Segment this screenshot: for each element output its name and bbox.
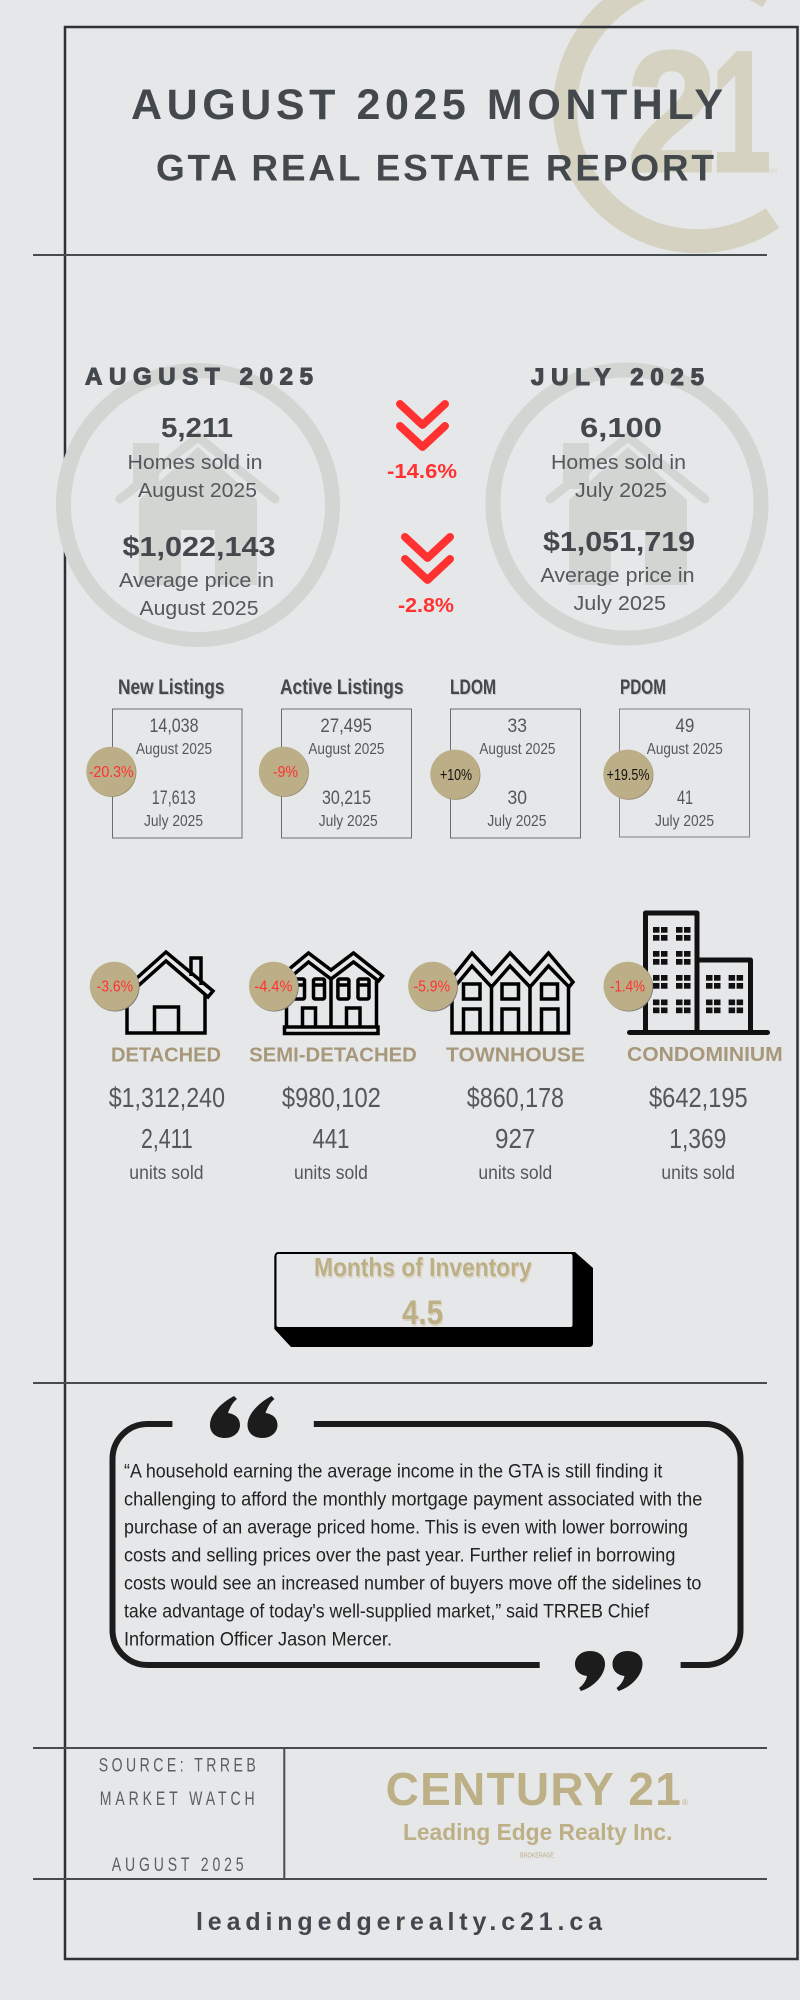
panel: LDOM: LDOM (450, 676, 496, 699)
stat: homes sold July: 6,100 (580, 412, 662, 443)
panel: July 2025 (493, 364, 761, 638)
quote text: Information Officer Jason Mercer. (124, 1629, 392, 1651)
stat: homes sold July (551, 412, 686, 502)
badge: +19.5%: +19.5% (607, 767, 650, 784)
panel: LDOM: 33 (508, 716, 527, 737)
panel: Detached: 2,411 (141, 1123, 193, 1154)
panel: PDOM: 49 (675, 716, 694, 737)
icon: detached house (127, 952, 213, 1033)
panel: Townhouse: $860,178 (467, 1082, 564, 1113)
stat: average price July: $1,051,719 (543, 526, 695, 557)
panel: quote (112, 1396, 740, 1691)
quote text: costs and selling prices over the past year. Further relief in borrowing (124, 1545, 675, 1567)
panel: Active Listings: 30,215 (322, 788, 371, 809)
badge: -3.6%: -3.6% (97, 979, 133, 996)
badge: -20.3% (86, 747, 136, 797)
panel: August 2025 (64, 364, 332, 640)
quote text: take advantage of today's well-supplied market,” said TRREB Chief (124, 1601, 650, 1623)
panel: Semi-detached: SEMI-DETACHED (249, 1045, 417, 1067)
watermark: Century 21 seal: SM (768, 169, 777, 175)
source block: AUGUST 2025 (112, 1854, 244, 1876)
quote text (124, 1461, 702, 1651)
panel: Semi-detached (249, 953, 417, 1184)
panel: Townhouse: TOWNHOUSE (446, 1045, 585, 1067)
website: leadingedgerealty.c21.ca (196, 1908, 603, 1936)
panel: LDOM: 30 (508, 788, 527, 809)
source block: MARKET WATCH (100, 1788, 255, 1810)
logo: Century 21 Leading Edge Realty: CENTURY 21 (386, 1763, 681, 1815)
badge: -9%: -9% (273, 764, 298, 781)
panel: Detached: DETACHED (111, 1045, 221, 1067)
icon: opening quote mark (210, 1396, 278, 1438)
change: average price -2.8%: -2.8% (398, 595, 454, 617)
title: GTA REAL ESTATE REPORT (156, 148, 714, 188)
stat: homes sold August: Homes sold in (128, 452, 262, 474)
badge: -1.4% (604, 962, 653, 1012)
panel: Townhouse: units sold (478, 1163, 552, 1184)
panel: PDOM: PDOM (620, 676, 666, 699)
stat: average price August: Average price in (119, 570, 274, 592)
panel: Active Listings: Active Listings (280, 676, 404, 699)
title: AUGUST 2025 MONTHLY (131, 81, 723, 129)
icon: condominium towers (627, 913, 770, 1035)
badge: -9% (259, 747, 309, 797)
panel: Townhouse (408, 953, 585, 1184)
logo: Century 21 Leading Edge Realty (386, 1763, 688, 1860)
panel: New Listings (86, 676, 242, 838)
panel: New Listings: July 2025 (144, 813, 203, 830)
quote text: challenging to afford the monthly mortgage payment associated with the (124, 1489, 702, 1511)
badge: -1.4%: -1.4% (610, 979, 645, 996)
stat: homes sold August (128, 412, 262, 502)
logo: Century 21 Leading Edge Realty: Leading Edge Realty Inc. (403, 1819, 672, 1845)
heading: August 2025: AUGUST 2025 (85, 364, 313, 390)
badge: -4.4% (249, 962, 299, 1012)
panel: Active Listings (259, 676, 412, 838)
stat: homes sold July: Homes sold in (551, 452, 686, 474)
stat: average price July: Average price in (540, 565, 694, 587)
panel: Condominium: units sold (661, 1163, 735, 1184)
panel: PDOM: August 2025 (647, 741, 723, 758)
panel: New Listings: August 2025 (136, 741, 212, 758)
panel: Townhouse: 927 (495, 1123, 535, 1154)
source block (99, 1748, 284, 1879)
badge: -20.3%: -20.3% (89, 764, 134, 781)
badge: +19.5% (603, 750, 653, 800)
source block: SOURCE: TRREB (99, 1754, 256, 1776)
icon: house in circle, August (64, 370, 332, 640)
quote text: costs would see an increased number of buyers move off the sidelines to (124, 1573, 702, 1595)
panel: Detached (90, 952, 225, 1184)
stat: average price July (540, 526, 695, 615)
watermark: Century 21 seal (565, 0, 777, 241)
badge: +10% (430, 750, 480, 800)
change: homes sold -14.6%: -14.6% (387, 461, 457, 483)
stat: homes sold August: August 2025 (138, 480, 257, 502)
panel: Semi-detached: units sold (294, 1163, 368, 1184)
panel: New Listings: New Listings (118, 676, 224, 699)
callout: months of inventory (274, 1252, 593, 1347)
heading: July 2025: JULY 2025 (531, 364, 704, 391)
quote text: purchase of an average priced home. This is even with lower borrowing (124, 1517, 688, 1539)
stat: average price August (119, 531, 276, 620)
badge: -3.6% (90, 962, 140, 1012)
stat: average price August: August 2025 (140, 598, 258, 620)
panel: Semi-detached: $980,102 (282, 1082, 381, 1113)
panel: Detached: $1,312,240 (109, 1082, 225, 1113)
icon: house in circle, July (493, 370, 761, 638)
panel: PDOM: July 2025 (655, 813, 714, 830)
title (131, 81, 723, 188)
panel: LDOM: August 2025 (479, 741, 555, 758)
callout: months of inventory: Months of Inventory (314, 1252, 532, 1282)
panel: Condominium: CONDOMINIUM (627, 1044, 783, 1066)
stat: homes sold July: July 2025 (575, 480, 667, 502)
badge: +10%: +10% (440, 767, 472, 784)
icon: semi-detached houses (284, 953, 382, 1034)
panel: New Listings: 17,613 (152, 788, 196, 809)
panel: Detached: units sold (129, 1163, 204, 1184)
icon: townhouses (449, 953, 573, 1033)
panel: Condominium: 1,369 (669, 1123, 726, 1154)
quote frame (112, 1424, 740, 1665)
callout: months of inventory: 4.5 (402, 1294, 443, 1332)
icon: closing quote mark (575, 1651, 642, 1691)
panel: PDOM: 41 (677, 788, 693, 809)
logo: Century 21 Leading Edge Realty: BROKERAGE (520, 1853, 554, 1860)
change: average price -2.8% (398, 537, 454, 617)
watermark: Century 21 seal: 2 (627, 16, 717, 208)
stat: average price August: $1,022,143 (122, 531, 276, 562)
panel: Condominium (604, 913, 783, 1184)
panel: New Listings: 14,038 (150, 716, 198, 737)
stat: average price July: July 2025 (574, 593, 666, 615)
panel: Active Listings: July 2025 (319, 813, 378, 830)
badge: -5.9% (408, 962, 458, 1012)
panel: Active Listings: 27,495 (320, 716, 372, 737)
logo: Century 21 Leading Edge Realty: ® (682, 1798, 688, 1807)
panel: Condominium: $642,195 (649, 1082, 748, 1113)
panel: Active Listings: August 2025 (308, 741, 384, 758)
change: homes sold -14.6% (387, 404, 457, 483)
panel: LDOM: July 2025 (487, 813, 546, 830)
badge: -4.4%: -4.4% (254, 979, 292, 996)
quote text: “A household earning the average income in the GTA is still finding it (124, 1461, 663, 1483)
panel: Semi-detached: 441 (312, 1123, 350, 1154)
panel: LDOM (430, 676, 580, 838)
stat: homes sold August: 5,211 (161, 412, 233, 443)
panel: PDOM (603, 676, 750, 837)
badge: -5.9%: -5.9% (414, 979, 450, 996)
